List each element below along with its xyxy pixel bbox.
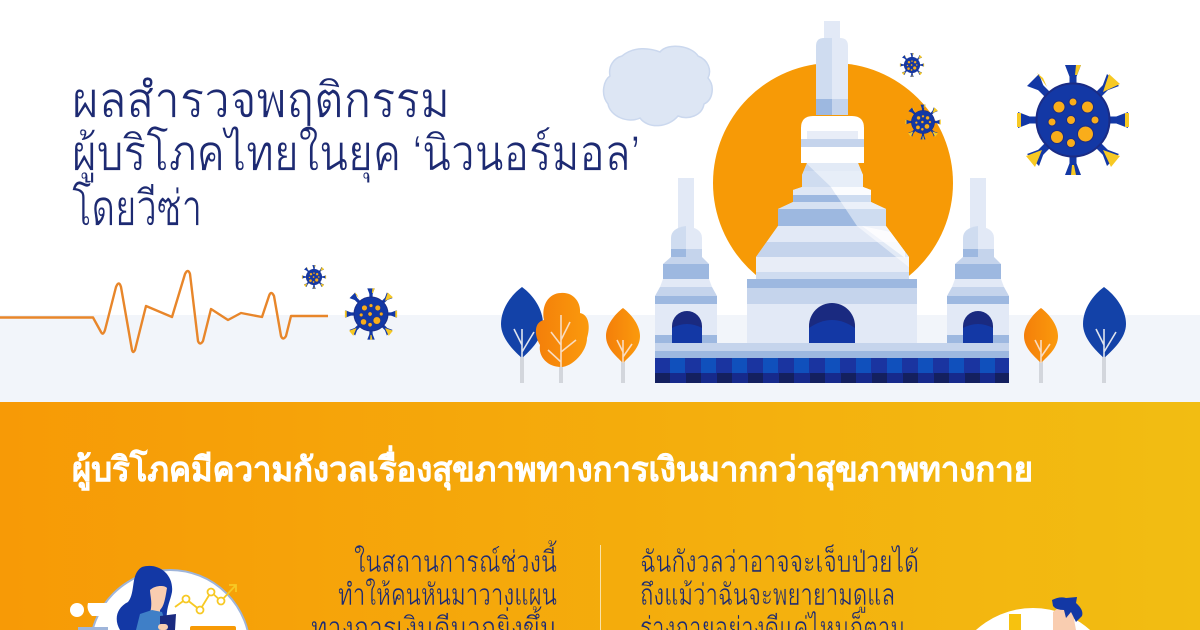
central stupa xyxy=(747,21,920,343)
pale ground band xyxy=(0,315,1200,402)
right quote: ถึงแม้ว่าฉันจะพยายามดูแล xyxy=(640,579,895,613)
white header background xyxy=(0,0,1200,402)
tree: orange blob xyxy=(536,293,589,383)
icon: virus on sun xyxy=(905,105,941,139)
tree: small orange right xyxy=(1024,308,1058,383)
left quote: ทำให้คนหันมาวางแผน xyxy=(338,578,557,612)
temple platform xyxy=(655,343,1009,383)
icon: virus by heartbeat xyxy=(345,288,397,340)
sun circle xyxy=(713,63,953,303)
tree: small orange left xyxy=(606,308,640,383)
heartbeat line xyxy=(0,271,328,352)
orange lower panel xyxy=(0,402,1200,630)
icon: large virus xyxy=(1017,65,1129,175)
left tower xyxy=(655,178,717,343)
section heading: ผู้บริโภคมีความกังวลเรื่องสุขภาพทางการเงินมากกว่าสุขภาพทางกาย xyxy=(72,445,1033,491)
title: ผลสำรวจพฤติกรรม xyxy=(72,74,450,128)
title: โดยวีซ่า xyxy=(72,180,202,236)
diagonal sash xyxy=(806,160,910,268)
tree: blue right xyxy=(1083,287,1126,383)
title: ผู้บริโภคไทยในยุค ‘นิวนอร์มอล’ xyxy=(72,125,640,183)
icon: small virus by heartbeat xyxy=(302,265,326,289)
left quote xyxy=(311,540,557,630)
illustration: woman planning finances xyxy=(70,566,250,630)
tree: blue left xyxy=(501,287,543,383)
right quote: ฉันกังวลว่าอาจจะเจ็บป่วยได้ xyxy=(640,543,919,579)
divider xyxy=(600,545,601,630)
left quote: ในสถานการณ์ช่วงนี้ xyxy=(354,540,557,579)
right tower xyxy=(947,178,1009,343)
title xyxy=(72,74,640,236)
right quote xyxy=(640,543,919,630)
cloud xyxy=(604,46,712,126)
icon: small virus over sky xyxy=(900,53,924,77)
illustration: man health xyxy=(948,597,1118,630)
